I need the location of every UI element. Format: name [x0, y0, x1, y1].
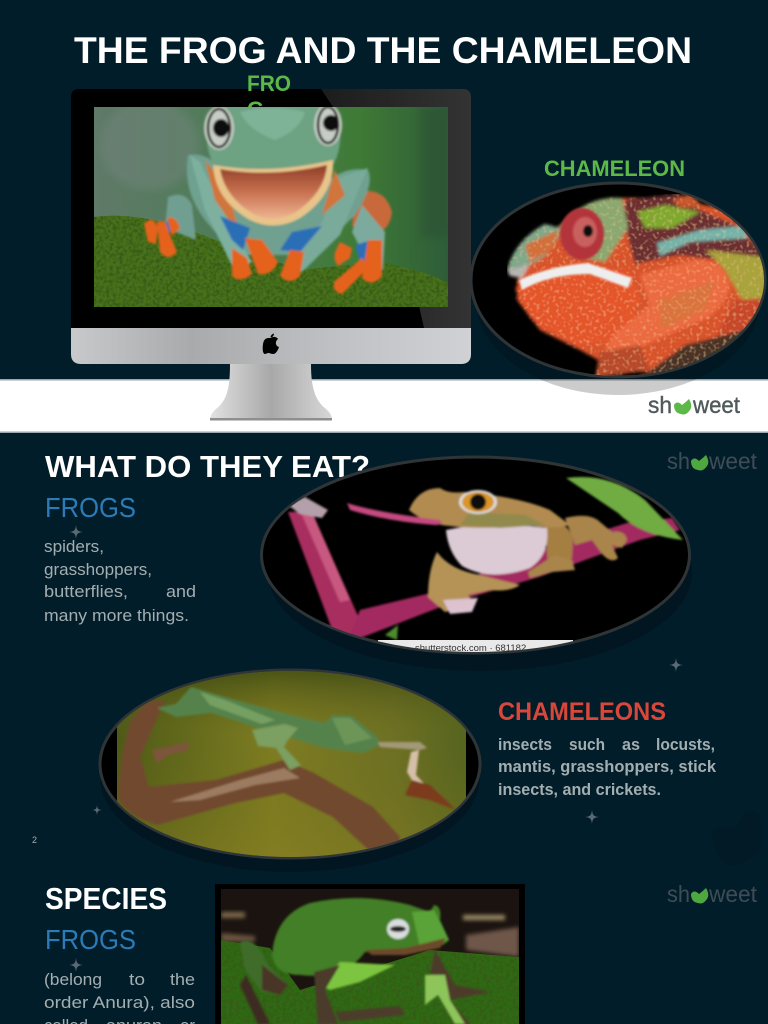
section: species — [44, 881, 196, 1024]
moss — [94, 216, 448, 307]
chameleons diet text: insects — [498, 736, 552, 754]
back legs — [165, 195, 196, 240]
title: THE FROG AND THE CHAMELEON — [74, 30, 692, 71]
chameleons diet text: insects, and crickets. — [498, 781, 661, 799]
eye — [387, 919, 409, 939]
chameleons diet text — [498, 736, 717, 799]
body — [187, 154, 370, 255]
chameleon oval photo — [471, 183, 768, 378]
chameleons heading: CHAMELEONS — [498, 698, 666, 726]
mouth — [213, 160, 333, 226]
frog eating oval photo — [262, 457, 690, 654]
ghost heart mark — [712, 810, 762, 865]
monitor chin — [71, 328, 471, 364]
white band — [0, 379, 768, 433]
leaf — [566, 477, 683, 540]
ghost showeet logo — [667, 448, 758, 474]
species text: the — [170, 971, 195, 989]
jaw — [515, 264, 640, 345]
branch — [640, 330, 745, 378]
chameleons diet text: locusts, — [656, 736, 715, 754]
orange toes — [144, 217, 382, 294]
chameleon shadow — [476, 205, 760, 395]
label: frog: G — [247, 97, 264, 122]
section: what do they eat — [44, 449, 370, 625]
ghost showeet logo: weet — [708, 448, 758, 474]
page number: 2 — [32, 835, 37, 845]
trunk — [118, 700, 400, 860]
frog body and head — [409, 488, 570, 528]
frog eating oval photo: shutterstock.com · 681182 — [415, 643, 526, 654]
ghost showeet logo: sh — [667, 448, 690, 474]
arm — [603, 260, 730, 359]
imac monitor with frog photo — [71, 71, 471, 420]
heading: WHAT DO THEY EAT? — [45, 449, 370, 484]
frogs heading: FROGS — [45, 492, 136, 523]
ghost showeet logo: weet — [708, 881, 758, 907]
tongue — [347, 503, 442, 525]
decorative stars — [69, 525, 683, 972]
chameleon label: CHAMELEON — [544, 156, 685, 181]
white stripe — [519, 263, 632, 290]
ghost showeet logo: sh — [667, 881, 690, 907]
frog oval shadow — [268, 475, 692, 671]
showeet logo — [648, 392, 741, 418]
prey — [405, 780, 456, 810]
label: frog: FRO — [247, 71, 291, 96]
body — [517, 198, 768, 372]
chameleon eating oval photo — [100, 670, 480, 860]
frog photo — [94, 100, 448, 307]
frog belly — [446, 524, 547, 575]
eye — [459, 490, 497, 514]
moss — [221, 940, 519, 1024]
chameleon oval shadow — [100, 684, 480, 872]
monitor reflection — [321, 89, 471, 328]
frogs diet text — [44, 538, 196, 625]
frogs heading: FROGS — [45, 924, 136, 955]
frog back leg — [565, 516, 627, 560]
frogs diet text: and — [166, 583, 196, 601]
head crest — [507, 224, 560, 270]
species frog photo — [215, 884, 525, 1024]
frogs diet text: grasshoppers, — [44, 561, 152, 579]
background litter — [221, 912, 519, 957]
frogs diet text: many more things. — [44, 607, 189, 625]
chameleon body — [157, 687, 380, 753]
frogs diet text: spiders, — [44, 538, 104, 556]
back leg — [240, 941, 288, 995]
monitor body — [71, 89, 471, 328]
branch — [348, 518, 680, 640]
frogs diet text: butterflies, — [44, 583, 128, 601]
showeet logo: weet — [692, 392, 741, 418]
back colours — [622, 194, 760, 266]
label: frog — [247, 71, 291, 122]
species text: order Anura), also — [44, 994, 195, 1012]
front leg — [314, 965, 340, 1024]
apple logo — [263, 334, 279, 354]
species text — [44, 971, 196, 1024]
monitor stand — [210, 364, 332, 420]
blue webbing — [220, 216, 250, 250]
species text: to — [129, 971, 145, 989]
frog body — [272, 898, 449, 976]
stem top — [288, 497, 328, 518]
showeet logo: sh — [648, 392, 672, 418]
species text: (belong — [44, 971, 102, 989]
eyes — [204, 106, 234, 150]
chameleons diet text: such — [569, 736, 605, 754]
watermark strip — [378, 640, 573, 652]
frog front leg — [428, 552, 520, 612]
heading: SPECIES — [45, 881, 167, 916]
head — [206, 107, 342, 170]
stem — [287, 510, 359, 634]
eye — [560, 208, 604, 260]
ghost showeet logo — [667, 881, 758, 907]
chameleons diet text: as — [622, 736, 640, 754]
chameleon leg — [252, 724, 301, 770]
tongue — [378, 742, 427, 750]
chameleons diet text: mantis, grasshoppers, stick — [498, 758, 717, 776]
